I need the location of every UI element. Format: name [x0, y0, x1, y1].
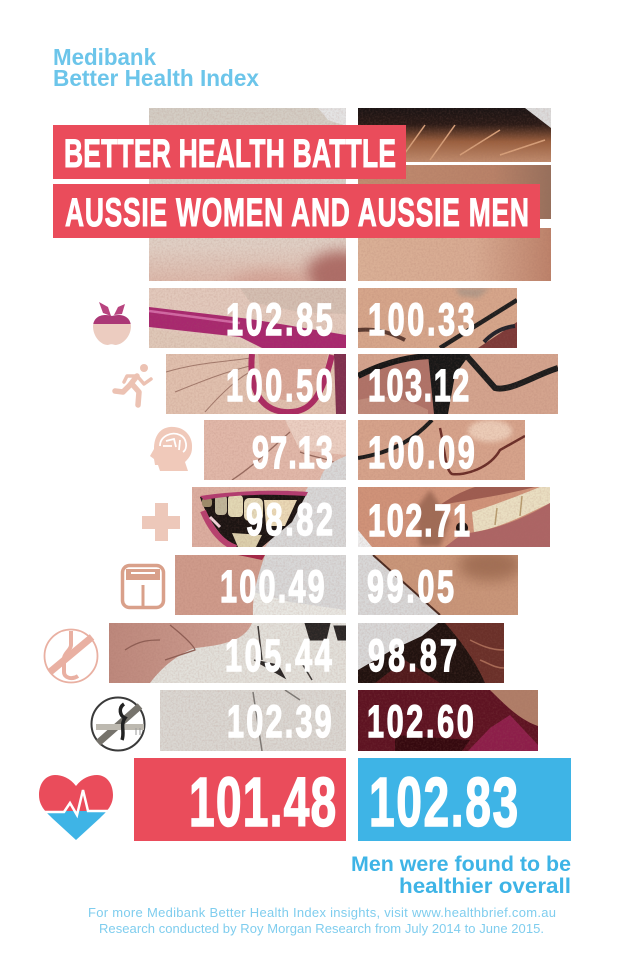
- row 5 scores: weight: 100.49: [220, 562, 325, 613]
- total score: women: [134, 758, 346, 841]
- row 6 scores: alcohol: [225, 631, 457, 682]
- row 3 scores: mental health: 97.13: [252, 428, 333, 479]
- strip: man's neck and collar: [358, 623, 504, 683]
- row 6 scores: alcohol: 98.87: [368, 631, 457, 682]
- conclusion: men healthier overall: healthier overall: [399, 875, 571, 898]
- row 4 scores: health: 98.82: [246, 495, 333, 546]
- strip: man's nose: [358, 420, 525, 480]
- strip: man's smile: [358, 487, 550, 547]
- strip: man's jaw: [358, 555, 518, 615]
- strip: woman's nose and cheek: [204, 420, 346, 480]
- icon: no alcohol circle: [44, 630, 98, 682]
- icon: heart with pulse: [39, 775, 113, 840]
- icon: no smoking circle: [92, 698, 144, 750]
- row 2 scores: exercise: 100.50: [226, 361, 333, 412]
- row 5 scores: weight: 99.05: [367, 562, 454, 613]
- strip: man's forehead lower: [358, 228, 551, 281]
- strip: woman's shirt: [160, 690, 346, 751]
- strip: woman's smile: [192, 487, 346, 548]
- strip: woman's neck and shirt: [109, 623, 346, 683]
- logo: Medibank Better Health Index: [53, 44, 259, 91]
- infographic canvas: [39, 48, 571, 936]
- icon: runner: [115, 364, 151, 405]
- footer source note: [88, 905, 556, 936]
- icon: weighing scale: [122, 566, 164, 608]
- title banner: line 1: BETTER HEALTH BATTLE: [64, 132, 396, 176]
- row 6 scores: alcohol: 105.44: [225, 631, 332, 682]
- photo skin grain texture: [149, 108, 558, 751]
- total score: men: [358, 758, 571, 841]
- total score: women: 101.48: [189, 762, 336, 841]
- logo: Medibank Better Health Index: Medibank: [53, 44, 156, 70]
- strip: man's brow and glasses: [358, 288, 517, 348]
- strip: woman's hair and forehead: [149, 108, 346, 281]
- icon: medical cross: [142, 503, 180, 541]
- title banner: line 2: AUSSIE WOMEN AND AUSSIE MEN: [65, 191, 529, 235]
- row 1 scores: nutrition: 102.85: [226, 295, 333, 346]
- row 5 scores: weight: [220, 562, 454, 613]
- strip: man's hair: [358, 108, 551, 162]
- row 7 scores: smoking: 102.60: [367, 697, 474, 748]
- icon: apple: [93, 302, 131, 345]
- row 7 scores: smoking: 102.39: [227, 697, 332, 748]
- row 7 scores: smoking: [227, 697, 474, 748]
- photo panel: man's face strips: [358, 108, 558, 751]
- row 4 scores: health: [246, 495, 470, 547]
- row 1 scores: nutrition: [226, 295, 475, 346]
- row 2 scores: exercise: 103.12: [368, 361, 469, 412]
- conclusion: men healthier overall: [351, 853, 571, 898]
- strip: man's forehead upper: [358, 165, 551, 219]
- strip: man's glasses bridge: [358, 354, 558, 414]
- row 1 scores: nutrition: 100.33: [368, 295, 475, 346]
- photo panel: woman's face strips: [109, 108, 346, 751]
- strip: man's red shirt: [358, 690, 538, 751]
- conclusion: men healthier overall: Men were found to be: [351, 853, 571, 876]
- strip: woman's eye wrinkles and frame: [166, 354, 346, 414]
- strip: woman's temple and pink glasses: [149, 288, 346, 348]
- footer source note: For more Medibank Better Health Index insights, visit www.healthbrief.com.au: [88, 905, 556, 920]
- logo: Medibank Better Health Index: Better Health Index: [53, 65, 259, 91]
- row 3 scores: mental health: [252, 428, 475, 479]
- strip: woman's chin and collar: [175, 555, 346, 615]
- row 4 scores: health: 102.71: [368, 496, 470, 547]
- icon: head with brain: [150, 427, 192, 471]
- row 2 scores: exercise: [226, 361, 469, 412]
- footer source note: Research conducted by Roy Morgan Research from July 2014 to June 2015.: [99, 921, 544, 936]
- total score: men: 102.83: [369, 762, 518, 841]
- row 3 scores: mental health: 100.09: [368, 428, 475, 479]
